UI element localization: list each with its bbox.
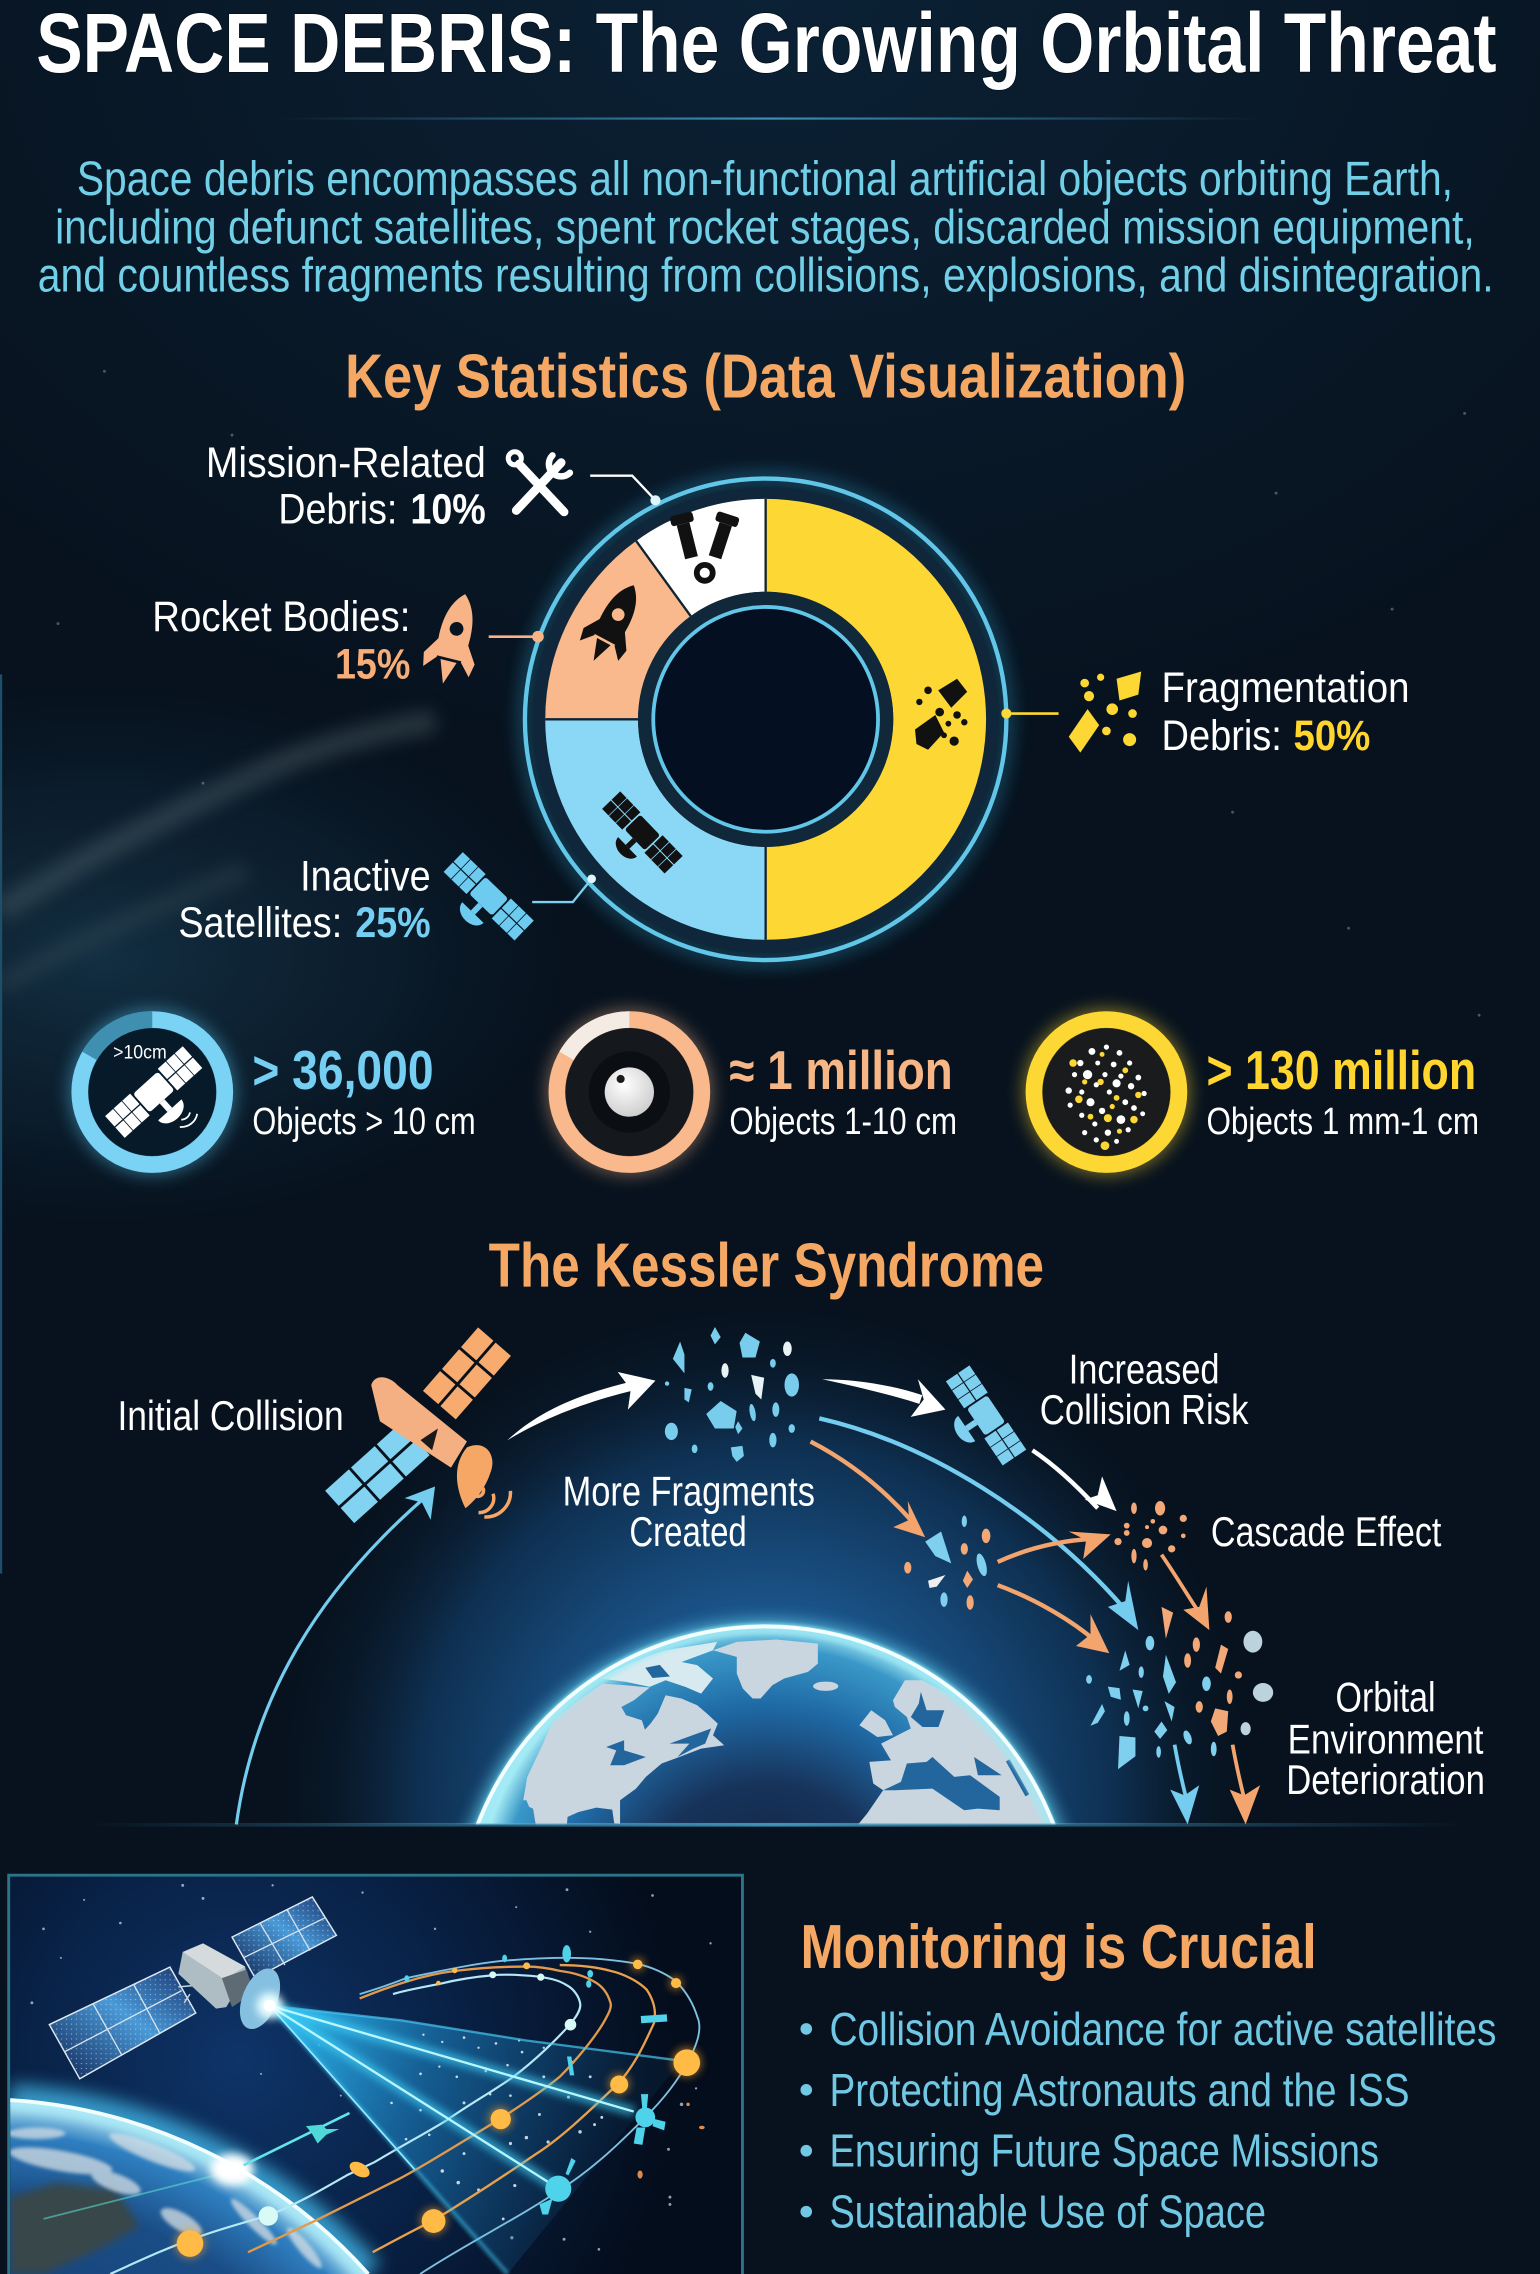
rocket track xyxy=(244,2113,349,2165)
icon: fragments in segment xyxy=(915,679,968,750)
label: orbital environment deterioration: Deterioration xyxy=(1286,1757,1485,1803)
icon: dust dots xyxy=(1066,1044,1147,1144)
scattered debris dots xyxy=(390,2034,603,2220)
arrow: blue to horizon xyxy=(1170,1745,1199,1824)
label: mission-related debris: Debris: xyxy=(278,486,397,534)
orbit paths xyxy=(110,1958,699,2274)
heading: the kessler syndrome: The Kessler Syndrome xyxy=(489,1231,1044,1300)
stat: objects 1 to 10 cm xyxy=(557,1020,957,1165)
segment: mission-related 10% xyxy=(636,499,766,616)
icon: fragments xyxy=(1069,671,1141,753)
label: inactive satellites: Satellites: xyxy=(178,899,342,947)
label: increased collision risk xyxy=(1040,1347,1249,1433)
europe and africa xyxy=(857,1680,1055,1825)
icon: colliding satellite xyxy=(325,1327,511,1523)
arrow: to cascade xyxy=(998,1531,1111,1562)
arrow: to second cluster xyxy=(811,1442,925,1537)
british isles xyxy=(859,1710,893,1737)
earth xyxy=(460,1610,1071,1824)
label: inactive satellites xyxy=(178,852,596,955)
icon: satellite xyxy=(105,1046,216,1153)
icon: satellite xyxy=(430,852,534,955)
fragment cluster: orbital deterioration xyxy=(1086,1607,1273,1769)
icon: bolts in segment xyxy=(669,511,740,581)
fragment cluster: second breakup xyxy=(904,1516,990,1610)
label: orbital environment deterioration: Orbital xyxy=(1336,1674,1436,1720)
donut chart xyxy=(525,479,1006,960)
label: more fragments created xyxy=(563,1468,815,1555)
icon: second satellite xyxy=(929,1365,1026,1477)
label: inactive satellites: Inactive xyxy=(300,852,431,900)
value: ≈ 1 million xyxy=(729,1040,953,1101)
label: orbital environment deterioration xyxy=(1286,1674,1485,1803)
label: rocket bodies: Rocket Bodies: xyxy=(152,593,410,641)
icon: tools xyxy=(508,452,570,512)
caption: Objects > 10 cm xyxy=(252,1100,476,1142)
arrow: cascade to deterioration xyxy=(1162,1555,1209,1630)
heading: Monitoring is Crucial xyxy=(800,1913,1317,1982)
arrow: to fragments xyxy=(508,1372,655,1440)
label: initial collision: Initial Collision xyxy=(117,1393,344,1439)
iceland xyxy=(813,1682,838,1691)
segment: inactive satellites 25% xyxy=(545,719,766,940)
label: rocket bodies: 15% xyxy=(335,641,410,689)
caption: Objects 1-10 cm xyxy=(729,1100,957,1142)
scan beams xyxy=(270,2006,682,2274)
label: orbital environment deterioration: Environment xyxy=(1288,1716,1484,1762)
label: increased collision risk: Collision Risk xyxy=(1040,1387,1249,1433)
arrow: to increased risk xyxy=(822,1379,945,1417)
title divider xyxy=(276,117,1262,120)
earth limb xyxy=(10,2100,368,2274)
stat: objects 1 mm to 1 cm xyxy=(1034,1020,1479,1165)
label: mission-related debris: 10% xyxy=(410,486,486,534)
label: inactive satellites: 25% xyxy=(355,899,431,947)
arrow: to cascade from satellite xyxy=(1032,1450,1117,1511)
bullet: sustainable use: Sustainable Use of Space xyxy=(829,2186,1266,2238)
arctic islands xyxy=(600,1642,717,1694)
kessler diagram xyxy=(120,1327,1484,1827)
segment: rocket bodies 15% xyxy=(545,541,691,719)
stat: objects larger than 10 cm: >10cm xyxy=(113,1042,167,1064)
horizon line xyxy=(87,1823,1465,1827)
label: fragmentation debris: 50% xyxy=(1293,712,1370,760)
segment: fragmentation 50% xyxy=(766,499,986,940)
label: fragmentation debris xyxy=(1001,664,1409,760)
label: more fragments created: More Fragments xyxy=(563,1468,815,1514)
label: fragmentation debris: Debris: xyxy=(1162,712,1282,760)
panel: monitoring is crucial xyxy=(800,1913,1496,2238)
icon: rocket xyxy=(417,588,491,690)
label: rocket bodies xyxy=(152,588,544,690)
label: more fragments created: Created xyxy=(629,1509,747,1555)
bullet: future missions: Ensuring Future Space Missions xyxy=(829,2125,1379,2177)
icon: rocket in segment xyxy=(572,574,655,672)
label: mission-related debris xyxy=(206,439,661,534)
fragment cluster: cascade xyxy=(1114,1501,1187,1571)
label: increased collision risk: Increased xyxy=(1069,1347,1220,1393)
label: cascade effect: Cascade Effect xyxy=(1211,1509,1442,1555)
bullet: protecting astronauts: Protecting Astronauts and the ISS xyxy=(829,2064,1409,2116)
value: > 36,000 xyxy=(252,1040,434,1101)
monitoring satellite xyxy=(49,1897,336,2079)
stat: objects larger than 10 cm xyxy=(80,1020,476,1165)
label: mission-related debris: Mission-Related xyxy=(206,439,486,487)
arrow: blue long orbit xyxy=(819,1418,1138,1630)
arrow: orange to horizon xyxy=(1230,1745,1260,1824)
tracked objects xyxy=(175,1945,705,2258)
greenland xyxy=(713,1640,818,1699)
label: fragmentation debris: Fragmentation xyxy=(1162,664,1409,712)
arrow: to final cluster xyxy=(998,1585,1109,1653)
value: > 130 million xyxy=(1206,1040,1476,1101)
scan cone xyxy=(270,2006,682,2274)
icon: debris sphere xyxy=(605,1067,654,1117)
heading: key statistics: Key Statistics (Data Visualization) xyxy=(345,342,1186,411)
stars xyxy=(30,1884,712,2251)
intro text xyxy=(38,153,1494,303)
icon: satellite in segment xyxy=(589,791,683,886)
panel: monitoring illustration xyxy=(7,1875,742,2274)
arrow: launch path xyxy=(236,1487,435,1824)
north america xyxy=(523,1684,724,1826)
fragment cluster: first breakup xyxy=(665,1327,799,1462)
caption: Objects 1 mm-1 cm xyxy=(1206,1100,1479,1142)
